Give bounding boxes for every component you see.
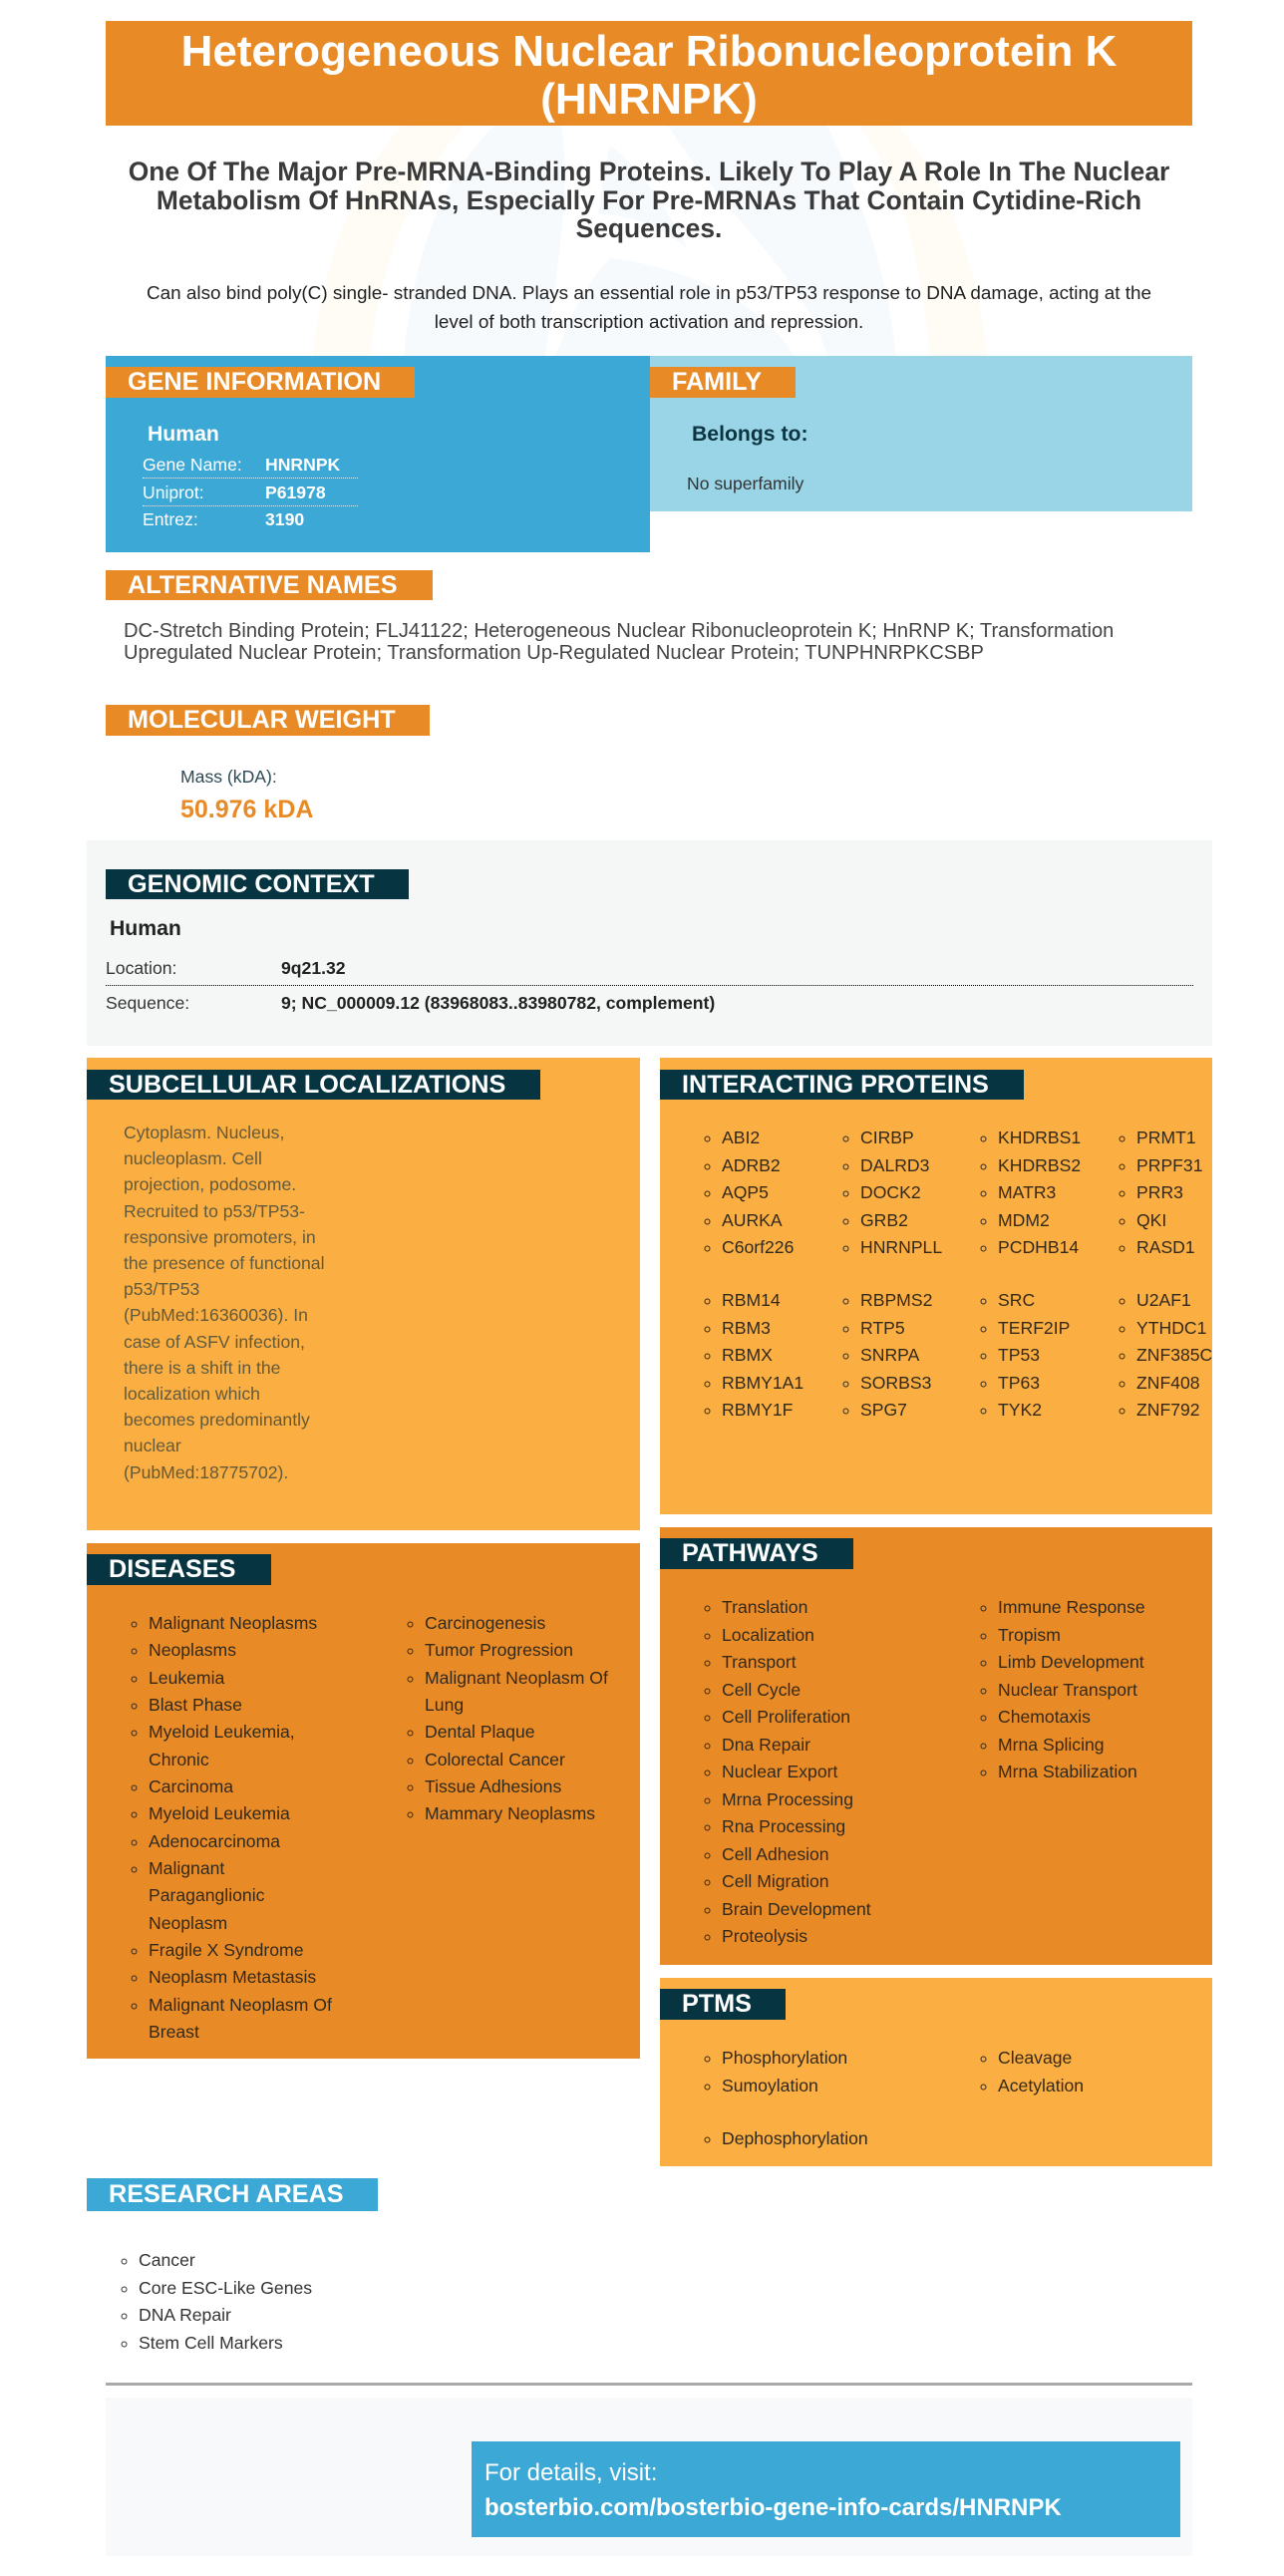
protein list group 2 column 3: TERF2IP xyxy=(998,1318,1070,1338)
disease list column 1: Neoplasm Metastasis xyxy=(149,1967,316,1987)
heading: ptms xyxy=(660,1989,786,2020)
protein list group 2 column 4: YTHDC1 xyxy=(1136,1318,1206,1338)
pathway list column 2: Tropism xyxy=(998,1625,1061,1645)
protein list group 2 column 2: SORBS3 xyxy=(860,1372,931,1392)
protein list group 2 column 3: TP63 xyxy=(998,1372,1040,1392)
disease list column 1: Fragile X Syndrome xyxy=(149,1940,303,1960)
protein list group 2 column 1: RBM3 xyxy=(722,1318,771,1338)
localization text: the presence of functional xyxy=(124,1253,325,1273)
subtitle: Sequences. xyxy=(576,213,722,243)
disease list column 1: Malignant Neoplasms xyxy=(149,1613,317,1633)
disease list column 2: Lung xyxy=(425,1695,464,1715)
details url: bosterbio.com/bosterbio-gene-info-cards/HNRNPK xyxy=(484,2494,1062,2521)
heading: diseases: DISEASES xyxy=(109,1555,235,1583)
protein list group 1 column 3: KHDRBS1 xyxy=(998,1127,1081,1147)
pathway list column 1 xyxy=(704,1597,871,1946)
localization text: projection, podosome. xyxy=(124,1174,296,1194)
panel: interacting proteins xyxy=(660,1058,1212,1514)
protein list group 2 column 2 xyxy=(843,1290,932,1420)
protein list group 2 column 4 xyxy=(1119,1290,1212,1420)
species label: Human xyxy=(148,423,219,446)
panel: subcellular localizations xyxy=(87,1058,640,1530)
pathway list column 1: Localization xyxy=(722,1625,814,1645)
heading: genomic context: GENOMIC CONTEXT xyxy=(128,870,375,898)
protein list group 1 column 4: QKI xyxy=(1136,1210,1166,1230)
callout: details link xyxy=(472,2441,1180,2537)
protein list group 1 column 4: PRMT1 xyxy=(1136,1127,1196,1147)
protein list group 2 column 3 xyxy=(981,1290,1070,1420)
ptm list column 2 xyxy=(981,2048,1084,2095)
heading: family xyxy=(650,367,796,398)
pathway list column 1: Proteolysis xyxy=(722,1926,807,1946)
mass value: 50.976 kDA xyxy=(180,796,313,823)
protein list group 2 column 4: ZNF792 xyxy=(1136,1400,1200,1420)
research areas list: Core ESC-Like Genes xyxy=(139,2277,312,2297)
disease list column 2: Carcinogenesis xyxy=(425,1613,545,1633)
protein list group 2 column 1: RBMY1F xyxy=(722,1400,793,1420)
disease list column 2: Tissue Adhesions xyxy=(425,1776,561,1796)
pathway list column 1: Mrna Processing xyxy=(722,1788,853,1808)
alternative names text: Upregulated Nuclear Protein; Transformation Up-Regulated Nuclear Protein; TUNPHNRPKCSBP xyxy=(124,642,984,664)
sequence row: Sequence: xyxy=(106,993,189,1013)
species label: Human xyxy=(110,917,181,940)
disease list column 2 xyxy=(407,1613,608,1823)
uniprot row: Uniprot: xyxy=(143,483,204,502)
protein list group 1 column 3: MDM2 xyxy=(998,1210,1050,1230)
protein list group 2 column 1: RBMY1A1 xyxy=(722,1372,803,1392)
pathway list column 2 xyxy=(981,1597,1145,1781)
protein list group 2 column 2: SNRPA xyxy=(860,1345,919,1365)
pathway list column 2: Mrna Stabilization xyxy=(998,1762,1137,1781)
protein list group 2 column 1: RBM14 xyxy=(722,1290,781,1310)
disease list column 2: Mammary Neoplasms xyxy=(425,1803,595,1823)
disease list column 1: Neoplasms xyxy=(149,1640,236,1660)
panel: family xyxy=(650,356,1192,511)
protein list group 1 column 2: HNRNPLL xyxy=(860,1237,942,1257)
location row: 9q21.32 xyxy=(281,958,346,978)
protein list group 2 column 3: TP53 xyxy=(998,1345,1040,1365)
heading: pathways xyxy=(660,1538,853,1569)
protein list group 1 column 2 xyxy=(843,1127,942,1257)
localization text: there is a shift in the xyxy=(124,1358,280,1378)
pathway list column 2: Mrna Splicing xyxy=(998,1735,1105,1755)
localization text xyxy=(124,1123,325,1482)
pathway list column 1: Cell Cycle xyxy=(722,1679,801,1699)
protein list group 1 column 1: AURKA xyxy=(722,1210,783,1230)
heading: diseases xyxy=(87,1554,271,1585)
localization text: responsive promoters, in xyxy=(124,1227,316,1247)
protein list group 1 column 2: GRB2 xyxy=(860,1210,908,1230)
protein list group 2 column 4: ZNF385C xyxy=(1136,1345,1212,1365)
details label: For details, visit: xyxy=(484,2459,657,2486)
rule xyxy=(106,2383,1192,2386)
research areas list: Stem Cell Markers xyxy=(139,2333,283,2353)
protein list group 2 column 4: ZNF408 xyxy=(1136,1372,1200,1392)
heading: pathways: PATHWAYS xyxy=(682,1539,818,1567)
protein list group 1 column 2: DALRD3 xyxy=(860,1154,929,1174)
title xyxy=(106,21,1192,126)
localization text: (PubMed:18775702). xyxy=(124,1462,288,1482)
protein list group 1 column 4 xyxy=(1119,1127,1202,1257)
pathway list column 1: Brain Development xyxy=(722,1898,871,1918)
disease list column 1: Chronic xyxy=(149,1750,209,1770)
disease list column 1: Myeloid Leukemia xyxy=(149,1803,290,1823)
background watermark logo xyxy=(313,126,987,356)
heading: ptms: PTMS xyxy=(682,1990,752,2018)
ptm list column 1 xyxy=(704,2048,868,2148)
research areas list xyxy=(122,2250,312,2353)
subtitle xyxy=(129,157,1169,243)
research areas list: DNA Repair xyxy=(139,2305,231,2325)
ptm list column 2: Cleavage xyxy=(998,2048,1072,2068)
uniprot row: P61978 xyxy=(265,483,326,502)
localization text: nucleoplasm. Cell xyxy=(124,1148,262,1168)
protein list group 2 column 1 xyxy=(704,1290,803,1420)
protein list group 1 column 3: PCDHB14 xyxy=(998,1237,1079,1257)
disease list column 1: Leukemia xyxy=(149,1668,224,1688)
disease list column 1 xyxy=(132,1613,332,2042)
footer panel xyxy=(106,2398,1192,2556)
subtitle: One Of The Major Pre-MRNA-Binding Proteins. Likely To Play A Role In The Nuclear xyxy=(129,157,1169,186)
description paragraph xyxy=(147,283,1151,333)
disease list column 1: Blast Phase xyxy=(149,1695,242,1715)
disease list column 1: Malignant xyxy=(149,1858,224,1878)
protein list group 1 column 4: PRR3 xyxy=(1136,1182,1183,1202)
protein list group 1 column 4: RASD1 xyxy=(1136,1237,1195,1257)
localization text: (PubMed:16360036). In xyxy=(124,1305,308,1325)
subtitle: Metabolism Of HnRNAs, Especially For Pre-MRNAs That Contain Cytidine-Rich xyxy=(157,185,1141,215)
disease list column 1: Carcinoma xyxy=(149,1776,233,1796)
protein list group 2 column 4: U2AF1 xyxy=(1136,1290,1191,1310)
protein list group 1 column 1: ADRB2 xyxy=(722,1154,781,1174)
localization text: nuclear xyxy=(124,1436,181,1455)
protein list group 1 column 1 xyxy=(704,1127,794,1257)
pathway list column 1: Rna Processing xyxy=(722,1816,845,1836)
heading: research areas xyxy=(87,2178,378,2211)
entrez row: 3190 xyxy=(265,509,304,529)
pathway list column 1: Cell Proliferation xyxy=(722,1707,850,1727)
mass label: Mass (kDA): xyxy=(180,767,277,787)
disease list column 2: Malignant Neoplasm Of xyxy=(425,1668,608,1688)
protein list group 1 column 3: KHDRBS2 xyxy=(998,1154,1081,1174)
protein list group 2 column 1: RBMX xyxy=(722,1345,773,1365)
description paragraph: Can also bind poly(C) single- stranded DNA. Plays an essential role in p53/TP53 response to DNA damage, acting at the xyxy=(147,283,1151,304)
heading: family: FAMILY xyxy=(672,368,762,396)
heading: subcellular localizations: SUBCELLULAR LOCALIZATIONS xyxy=(109,1071,505,1099)
panel: gene information xyxy=(106,356,650,552)
description paragraph: level of both transcription activation and repression. xyxy=(435,312,863,333)
disease list column 2: Colorectal Cancer xyxy=(425,1750,565,1770)
heading: research areas: RESEARCH AREAS xyxy=(109,2180,344,2208)
protein list group 1 column 4: PRPF31 xyxy=(1136,1154,1202,1174)
protein list group 1 column 1: ABI2 xyxy=(722,1127,760,1147)
pathway list column 2: Limb Development xyxy=(998,1652,1144,1672)
gene name row: HNRNPK xyxy=(265,455,340,475)
pathway list column 1: Dna Repair xyxy=(722,1735,810,1755)
protein list group 2 column 2: RBPMS2 xyxy=(860,1290,932,1310)
title: Heterogeneous Nuclear Ribonucleoprotein K xyxy=(181,27,1117,76)
protein list group 2 column 3: SRC xyxy=(998,1290,1035,1310)
panel: diseases xyxy=(87,1543,640,2059)
pathway list column 1: Nuclear Export xyxy=(722,1762,837,1781)
protein list group 2 column 2: SPG7 xyxy=(860,1400,907,1420)
research areas list: Cancer xyxy=(139,2250,195,2270)
localization text: Cytoplasm. Nucleus, xyxy=(124,1123,284,1142)
disease list column 2: Dental Plaque xyxy=(425,1722,535,1742)
disease list column 1: Myeloid Leukemia, xyxy=(149,1722,295,1742)
entrez row: Entrez: xyxy=(143,509,198,529)
localization text: p53/TP53 xyxy=(124,1279,199,1299)
localization text: becomes predominantly xyxy=(124,1410,310,1430)
protein list group 1 column 3 xyxy=(981,1127,1081,1257)
pathway list column 1: Transport xyxy=(722,1652,797,1672)
disease list column 1: Paraganglionic xyxy=(149,1885,264,1905)
heading: molecular weight: MOLECULAR WEIGHT xyxy=(128,706,396,734)
panel: pathways xyxy=(660,1527,1212,1965)
panel: ptms xyxy=(660,1978,1212,2166)
pathway list column 2: Chemotaxis xyxy=(998,1707,1091,1727)
title: (HNRNPK) xyxy=(540,75,758,124)
ptm list column 1: Sumoylation xyxy=(722,2076,818,2095)
heading: interacting proteins: INTERACTING PROTEINS xyxy=(682,1071,989,1099)
protein list group 2 column 3: TYK2 xyxy=(998,1400,1042,1420)
protein list group 2 column 2: RTP5 xyxy=(860,1318,905,1338)
localization text: Recruited to p53/TP53- xyxy=(124,1201,305,1221)
alternative names text xyxy=(124,620,1114,664)
disease list column 2: Tumor Progression xyxy=(425,1640,573,1660)
gene name row xyxy=(143,452,358,479)
protein list group 1 column 1: C6orf226 xyxy=(722,1237,794,1257)
protein list group 1 column 2: CIRBP xyxy=(860,1127,914,1147)
localization text: case of ASFV infection, xyxy=(124,1332,305,1352)
disease list column 1: Adenocarcinoma xyxy=(149,1831,280,1851)
uniprot row xyxy=(143,480,358,506)
ptm list column 2: Acetylation xyxy=(998,2076,1084,2095)
panel: genomic context xyxy=(87,840,1212,1046)
pathway list column 1: Translation xyxy=(722,1597,807,1617)
protein list group 1 column 2: DOCK2 xyxy=(860,1182,921,1202)
localization text: localization which xyxy=(124,1384,260,1404)
alternative names text: DC-Stretch Binding Protein; FLJ41122; Heterogeneous Nuclear Ribonucleoprotein K; HnRNP K; Transformation xyxy=(124,620,1114,642)
pathway list column 2: Nuclear Transport xyxy=(998,1679,1137,1699)
entrez row xyxy=(143,509,304,529)
protein list group 1 column 3: MATR3 xyxy=(998,1182,1056,1202)
pathway list column 1: Cell Migration xyxy=(722,1871,829,1891)
disease list column 1: Neoplasm xyxy=(149,1913,227,1933)
heading: alternative names: ALTERNATIVE NAMES xyxy=(128,571,398,599)
belongs to label: Belongs to: xyxy=(692,423,808,446)
ptm list column 1: Dephosphorylation xyxy=(722,2128,868,2148)
ptm list column 1: Phosphorylation xyxy=(722,2048,847,2068)
location row xyxy=(106,955,1193,986)
family value: No superfamily xyxy=(687,474,803,493)
heading: gene information: GENE INFORMATION xyxy=(128,368,381,396)
sequence row: 9; NC_000009.12 (83968083..83980782, complement) xyxy=(281,993,715,1013)
pathway list column 1: Cell Adhesion xyxy=(722,1844,829,1864)
gene name row: Gene Name: xyxy=(143,455,242,475)
pathway list column 2: Immune Response xyxy=(998,1597,1145,1617)
disease list column 1: Breast xyxy=(149,2022,199,2042)
protein list group 1 column 1: AQP5 xyxy=(722,1182,769,1202)
disease list column 1: Malignant Neoplasm Of xyxy=(149,1995,332,2015)
location row: Location: xyxy=(106,958,176,978)
